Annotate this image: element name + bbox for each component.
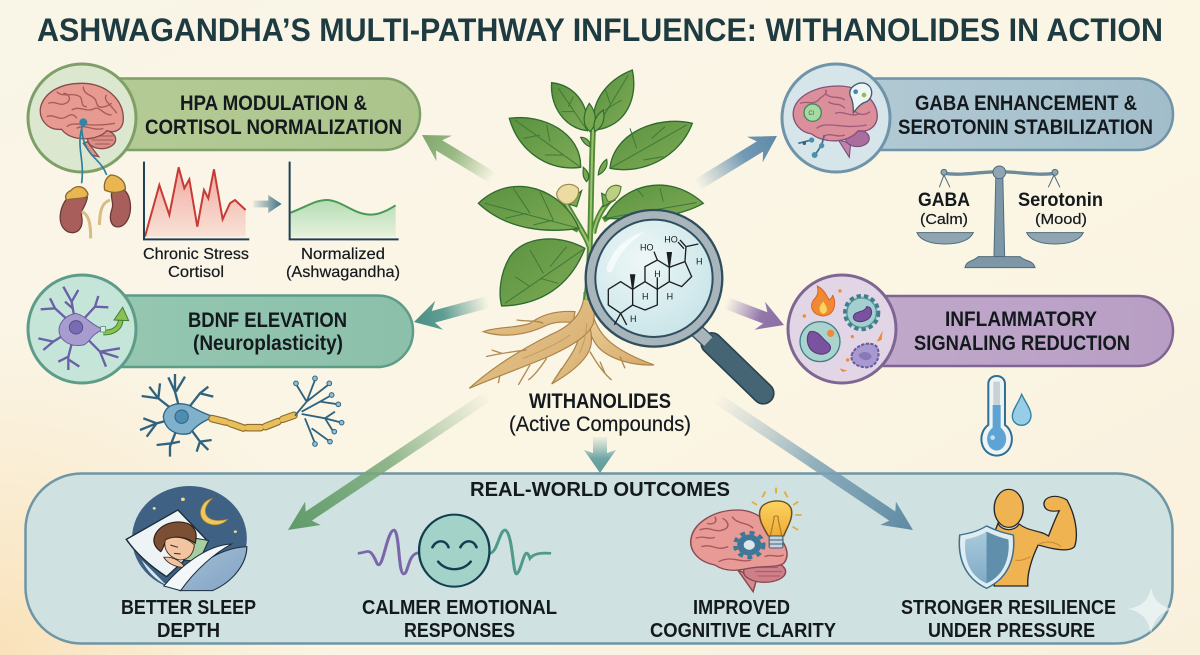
molecule — [608, 235, 702, 325]
outcome: better sleep — [121, 486, 256, 642]
outcome: stronger resilience: STRONGER RESILIENCE — [901, 597, 1116, 619]
chart: chronic stress cortisol: Cortisol — [168, 264, 224, 281]
icon: sleeping person — [126, 486, 247, 591]
icon: sparkle watermark — [1127, 587, 1175, 635]
arrow: to BDNF — [410, 287, 492, 336]
magnifier handle — [712, 343, 763, 393]
icon: kidneys — [60, 175, 130, 238]
label: withanolides — [509, 390, 691, 436]
magnifier lens — [586, 210, 722, 347]
arrow: to outcomes — [584, 437, 616, 473]
label: panel text — [145, 92, 402, 139]
icon: balance scale with GABA and serotonin: Serotonin — [1018, 190, 1103, 211]
label: withanolides: (Active Compounds) — [509, 413, 691, 436]
panel: GABA and serotonin — [782, 64, 1173, 172]
icon: smiling face with waves — [358, 515, 551, 587]
icon: balance scale with GABA and serotonin — [917, 166, 1103, 268]
outcome: calmer emotional responses: RESPONSES — [404, 620, 515, 642]
arrow: stress to normalized — [253, 195, 282, 213]
heading: real-world outcomes: REAL-WORLD OUTCOMES — [470, 479, 730, 501]
outcome: better sleep: DEPTH — [157, 620, 220, 642]
chart: normalized: (Ashwagandha) — [286, 264, 400, 281]
outcome: improved cognitive clarity: COGNITIVE CLARITY — [650, 620, 837, 642]
panel: BDNF elevation — [28, 275, 413, 383]
arrow: to better sleep — [280, 383, 498, 542]
chart: chronic stress cortisol — [143, 162, 249, 281]
panel: HPA modulation — [28, 64, 420, 238]
icon: balance scale with GABA and serotonin: (Calm) — [920, 211, 968, 228]
chart: chronic stress cortisol: Chronic Stress — [143, 246, 249, 263]
label: panel text — [188, 309, 347, 355]
icon: neuron with growth arrow — [38, 287, 129, 370]
icon: myelinated neuron — [140, 374, 344, 457]
central illustration: plant, root and magnifier — [469, 70, 763, 393]
outcome: calmer emotional responses: CALMER EMOTIONAL — [362, 597, 557, 619]
label: panel text: HPA MODULATION & — [180, 92, 367, 115]
icon: brain with receptors — [793, 83, 877, 158]
arrow: to inflammatory — [721, 289, 789, 339]
molecule: HO — [640, 243, 653, 253]
label: panel text: (Neuroplasticity) — [193, 332, 343, 355]
leaves — [478, 70, 703, 306]
icon: brain with receptors: Cl — [808, 111, 814, 117]
icon: balance scale with GABA and serotonin: (Mood) — [1035, 211, 1087, 228]
outcome: improved cognitive clarity — [650, 488, 837, 642]
outcome: better sleep: BETTER SLEEP — [121, 597, 256, 619]
outcome: calmer emotional responses — [358, 515, 557, 642]
arrow: to HPA — [414, 122, 501, 191]
label: panel text: CORTISOL NORMALIZATION — [145, 116, 402, 139]
outcome: improved cognitive clarity: IMPROVED — [693, 597, 790, 619]
label: panel text: GABA ENHANCEMENT & — [915, 92, 1137, 115]
icon: shield and muscular figure — [959, 489, 1076, 588]
label: panel text — [914, 308, 1130, 355]
icon: thermometer and water drop — [981, 376, 1031, 456]
panel: real-world outcomes — [26, 474, 1172, 644]
label: panel text: BDNF ELEVATION — [188, 309, 347, 332]
label: withanolides: WITHANOLIDES — [529, 390, 671, 413]
molecule: H — [630, 314, 636, 324]
icon: brain with HPA axis — [40, 83, 123, 183]
small top leaves and buds — [567, 103, 615, 207]
chart: normalized — [286, 162, 400, 281]
title: ASHWAGANDHA’S MULTI-PATHWAY INFLUENCE: WITHANOLIDES IN ACTION — [37, 12, 1163, 48]
root — [469, 293, 654, 388]
outcome: stronger resilience — [901, 489, 1116, 642]
label: panel text: INFLAMMATORY — [945, 308, 1097, 331]
label: panel text — [898, 92, 1153, 139]
arrow: to GABA — [689, 123, 785, 198]
molecule: HO — [664, 235, 678, 245]
chart: normalized: Normalized — [301, 246, 385, 263]
icon: brain with gear and bulb — [691, 488, 802, 592]
label: panel text: SIGNALING REDUCTION — [914, 332, 1130, 355]
molecule: H — [667, 291, 673, 301]
panel: inflammatory signaling — [788, 275, 1173, 383]
label: panel text: SEROTONIN STABILIZATION — [898, 116, 1153, 139]
outcome: stronger resilience: UNDER PRESSURE — [928, 620, 1095, 642]
arrow: to stronger resilience — [708, 386, 921, 542]
stems — [547, 123, 633, 300]
icon: balance scale with GABA and serotonin: GABA — [918, 190, 970, 211]
icon: immune cells and flame — [800, 286, 883, 372]
molecule: H — [654, 269, 661, 279]
molecule: H — [696, 256, 702, 266]
molecule: H — [642, 291, 648, 301]
